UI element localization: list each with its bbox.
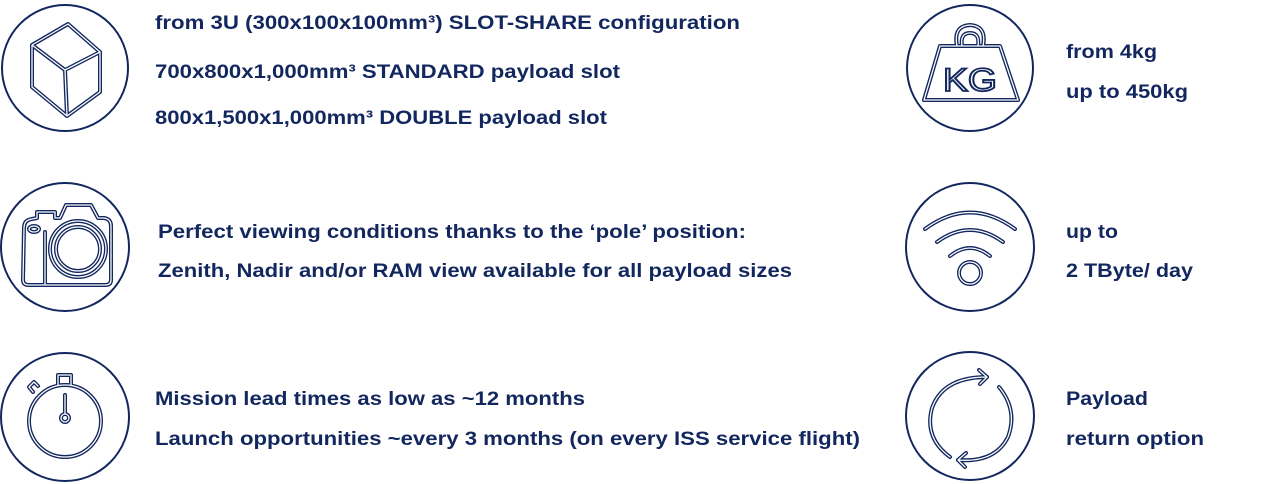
text: data rate: 2 TByte/ day xyxy=(1066,261,1193,282)
text: payload sizes: 700x800x1,000mm³ STANDARD payload slot xyxy=(155,62,621,83)
text: data rate xyxy=(1066,222,1193,282)
icon: camera xyxy=(1,183,129,311)
icon: return arrows xyxy=(906,352,1034,480)
text: return: return option xyxy=(1066,429,1204,450)
text: mass xyxy=(1066,42,1188,103)
text: lead times: Launch opportunities ~every 3 months (on every ISS service flight) xyxy=(155,429,860,450)
icon: wifi xyxy=(906,183,1034,311)
text: mass: up to 450kg xyxy=(1066,82,1188,103)
text: viewing: Zenith, Nadir and/or RAM view available for all payload sizes xyxy=(158,261,792,282)
icon: stopwatch xyxy=(1,353,129,481)
text: data rate: up to xyxy=(1066,222,1118,243)
text: payload sizes: from 3U (300x100x100mm³) SLOT-SHARE configuration xyxy=(155,13,740,34)
text: mass: from 4kg xyxy=(1066,42,1157,63)
icon: weight: KG xyxy=(943,62,997,98)
text: payload sizes: 800x1,500x1,000mm³ DOUBLE payload slot xyxy=(155,108,608,129)
text: return: Payload xyxy=(1066,389,1148,410)
text: lead times xyxy=(155,389,860,450)
text: payload sizes xyxy=(155,13,740,129)
text: viewing: Perfect viewing conditions thanks to the ‘pole’ position: xyxy=(158,222,746,243)
text: lead times: Mission lead times as low as ~12 months xyxy=(155,389,585,410)
text: return xyxy=(1066,389,1204,450)
icon: weight xyxy=(907,5,1033,131)
icon: cube xyxy=(2,5,128,131)
text: viewing xyxy=(158,222,792,282)
